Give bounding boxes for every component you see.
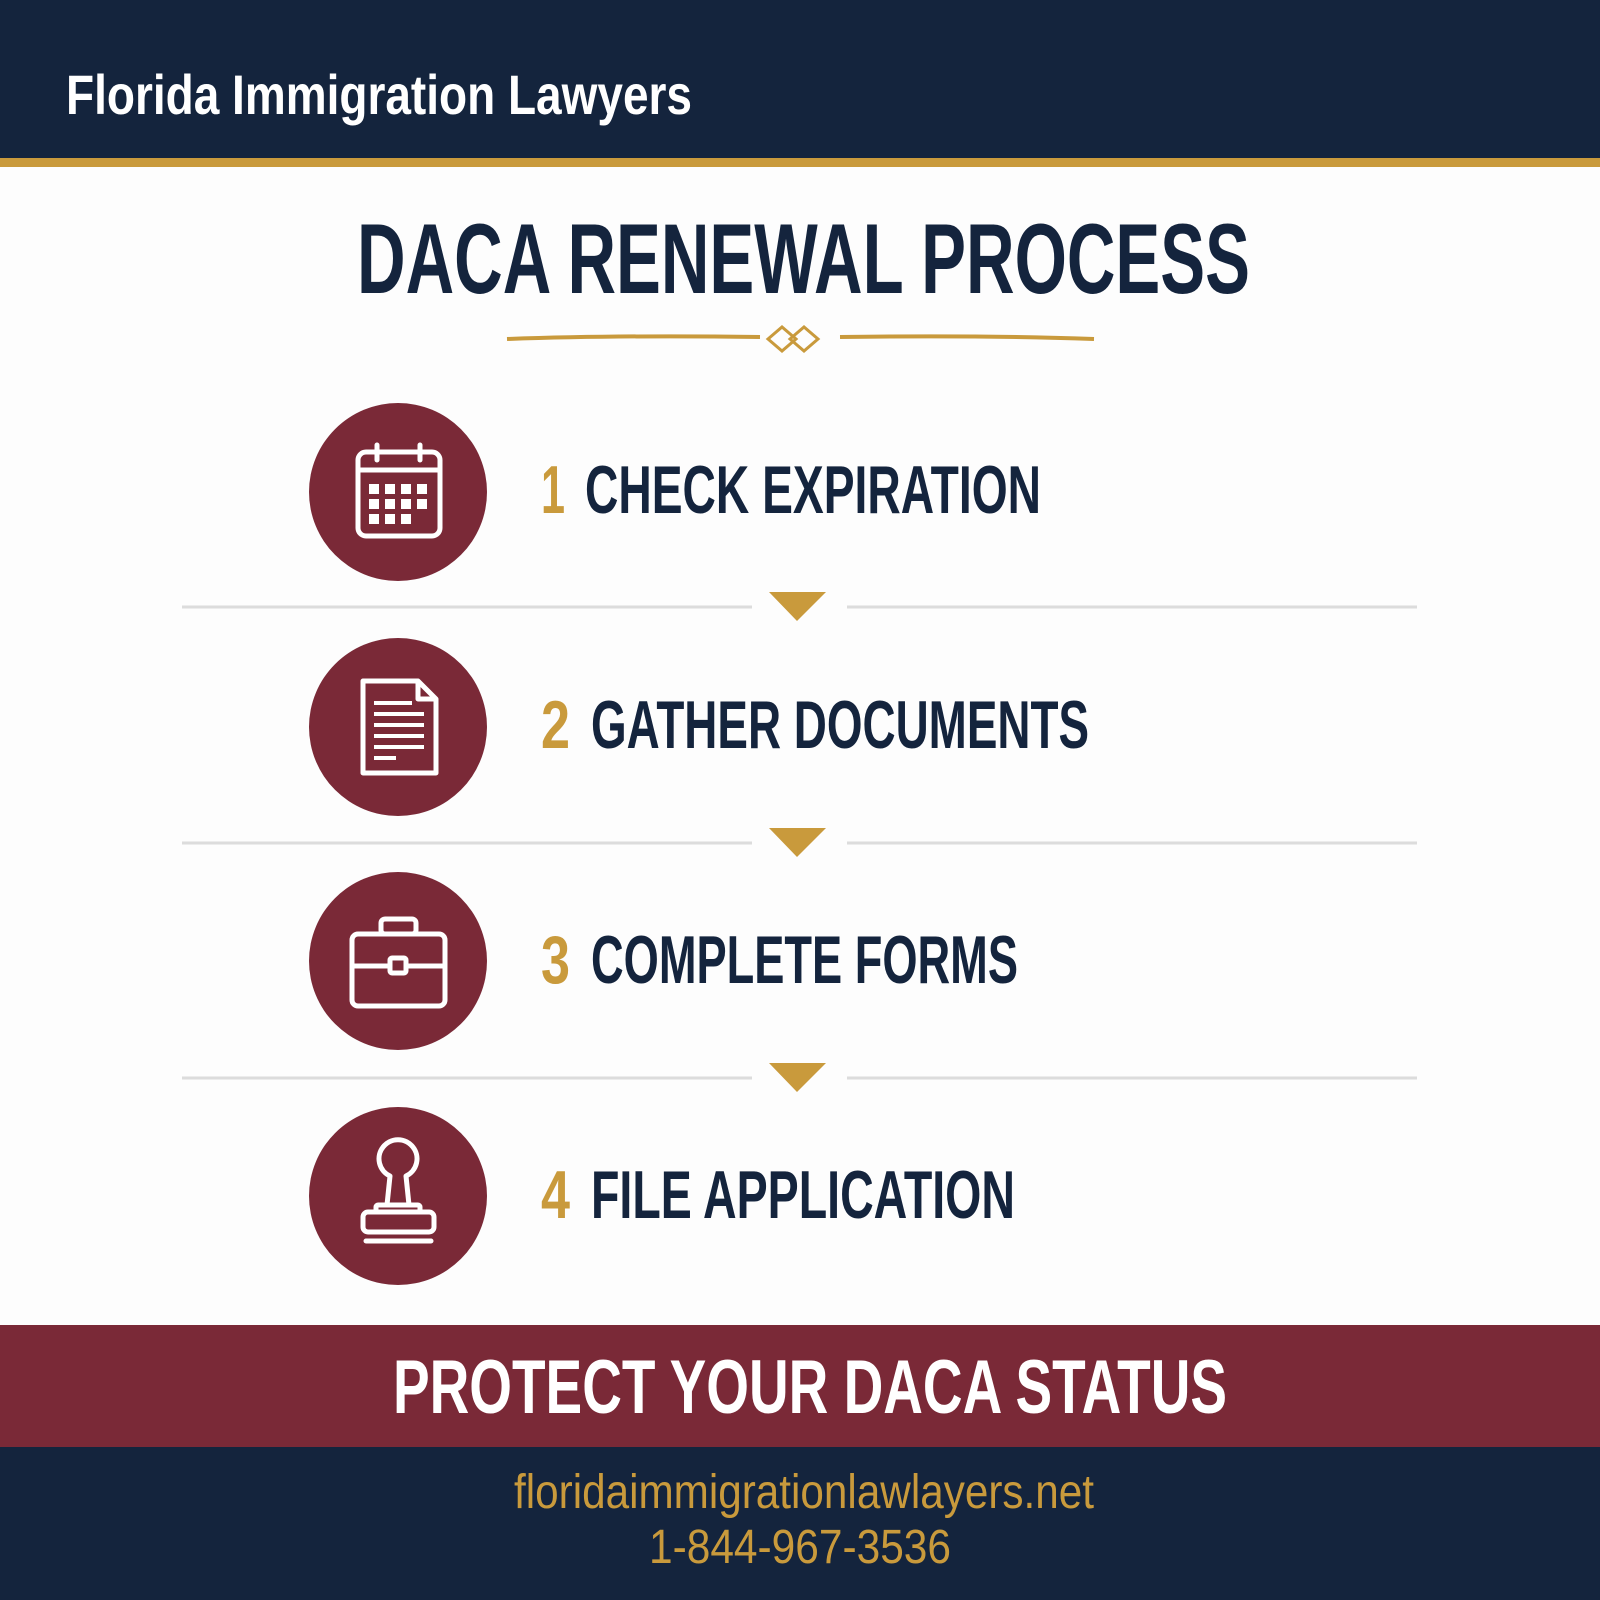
step 2: GATHER DOCUMENTS [591,687,1089,763]
step 2: 2 [541,687,570,763]
icon: calendar [358,445,440,536]
step 4: 4 [541,1157,570,1233]
icon: stamp [363,1140,434,1241]
phone: 1-844-967-3536 [649,1521,951,1574]
step 4 [309,1107,1015,1285]
ornament [507,327,1094,351]
arrow divider 1 [182,592,1417,621]
step 3 [309,872,1018,1050]
step 1: CHECK EXPIRATION [585,452,1041,528]
icon: document [363,681,436,773]
step 3: 3 [541,922,570,998]
banner: protect your daca status [0,1325,1600,1447]
website: floridaimmigrationlawlayers.net [514,1466,1094,1519]
header text: Florida Immigration Lawyers [66,63,692,126]
footer [0,1447,1600,1600]
arrow divider 2 [182,828,1417,857]
banner: protect your daca status: PROTECT YOUR DACA STATUS [393,1345,1227,1430]
step 2 [309,638,1089,816]
header bar [0,0,1600,167]
step 1: 1 [541,452,565,528]
step 3: COMPLETE FORMS [591,922,1018,998]
step 4: FILE APPLICATION [591,1157,1015,1233]
icon: briefcase [352,919,445,1006]
arrow divider 3 [182,1063,1417,1092]
step 1 [309,403,1041,581]
